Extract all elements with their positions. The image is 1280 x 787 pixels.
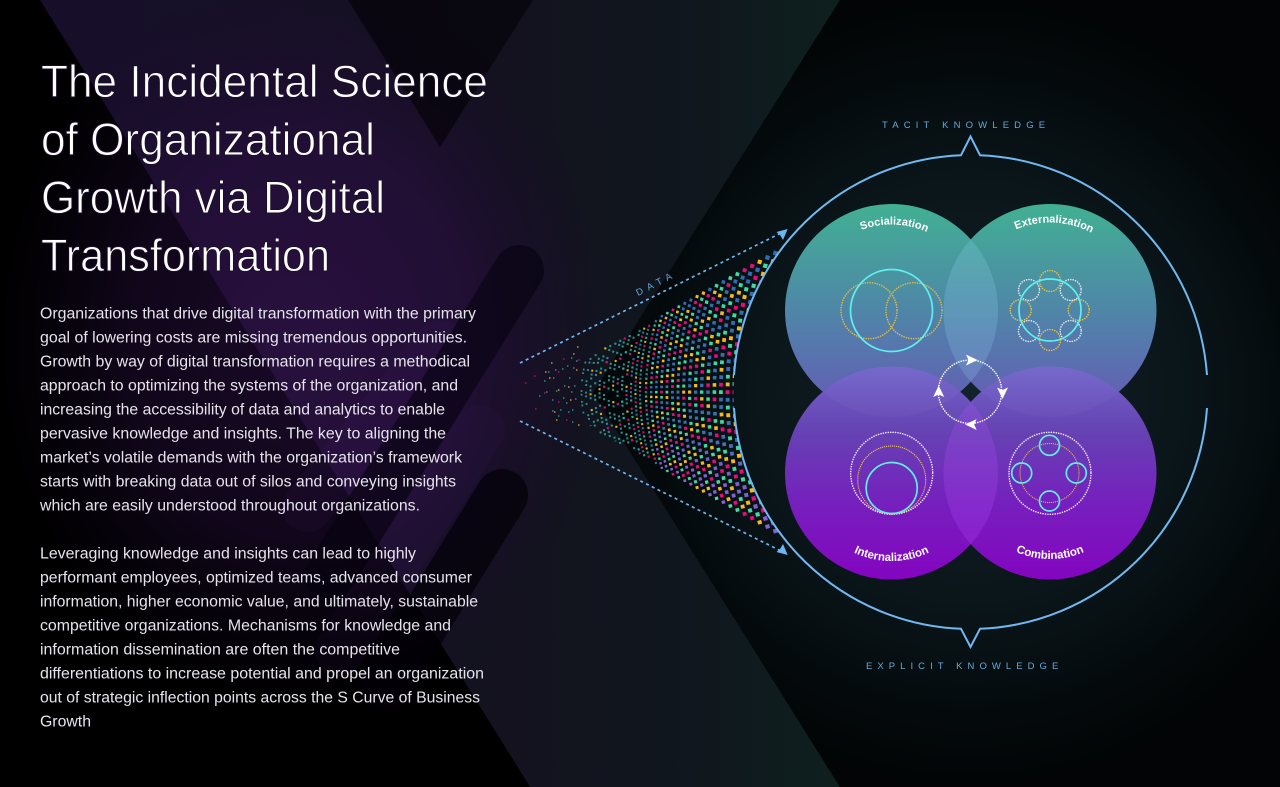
body paragraph 2: information dissemination are often the competitive: [40, 642, 400, 658]
body paragraph 1: [39, 306, 476, 514]
body paragraph 2: out of strategic inflection points across the S Curve of Business: [40, 690, 480, 706]
body paragraph 1: Organizations that drive digital transformation with the primary: [40, 306, 476, 322]
title: of Organizational: [41, 114, 375, 165]
label: internalization: Internalization: [854, 546, 929, 561]
icon: combination: [1009, 432, 1091, 514]
body paragraph 2: performant employees, optimized teams, advanced consumer: [40, 570, 472, 586]
icon: internalization: [851, 432, 933, 514]
body paragraph 2: differentiations to increase potential and propel an organization: [40, 666, 484, 682]
body paragraph 2: competitive organizations. Mechanisms for knowledge and: [40, 618, 451, 634]
label: data: DATA: [634, 269, 679, 299]
body paragraph 1: goal of lowering costs are missing tremendous opportunities.: [40, 330, 467, 346]
body paragraph 2: information, higher economic value, and ultimately, sustainable: [40, 594, 478, 610]
label: socialization: Socialization: [860, 216, 928, 232]
data arrow: bottom: [520, 421, 788, 555]
body paragraph 2: Growth: [40, 714, 91, 730]
body paragraph 1: starts with breaking data out of silos and conveying insights: [40, 474, 456, 490]
label: combination: Combination: [1017, 546, 1084, 559]
body paragraph 1: pervasive knowledge and insights. The key to aligning the: [40, 426, 446, 442]
body paragraph 1: market’s volatile demands with the organization’s framework: [40, 450, 462, 466]
body paragraph 1: Growth by way of digital transformation requires a methodical: [40, 354, 470, 370]
data funnel: sparse scattered particles: [525, 347, 580, 425]
body paragraph 1: approach to optimizing the systems of the organization, and: [40, 378, 458, 394]
data arrow: top: [520, 229, 788, 363]
label: tacit knowledge: TACIT KNOWLEDGE: [882, 120, 1050, 131]
body paragraph 1: increasing the accessibility of data and analytics to enable: [40, 402, 445, 418]
title: [41, 56, 488, 281]
body paragraph 1: which are easily understood throughout organizations.: [39, 498, 420, 514]
label: explicit knowledge: EXPLICIT KNOWLEDGE: [866, 661, 1063, 672]
icon: knowledge cycle arrows: [933, 354, 1008, 430]
label: externalization: Externalization: [1014, 214, 1093, 232]
body paragraph 2: [40, 546, 484, 730]
title: The Incidental Science: [41, 56, 488, 107]
large outer circle with notches: [734, 136, 1207, 647]
icon: externalization: [1010, 270, 1089, 350]
icon: socialization: [841, 270, 942, 352]
body paragraph 2: Leveraging knowledge and insights can lead to highly: [40, 546, 416, 562]
title: Growth via Digital: [41, 172, 385, 223]
venn: four knowledge circles: [785, 204, 1156, 580]
title: Transformation: [41, 230, 330, 281]
data funnel: coloured squares: [582, 251, 776, 533]
